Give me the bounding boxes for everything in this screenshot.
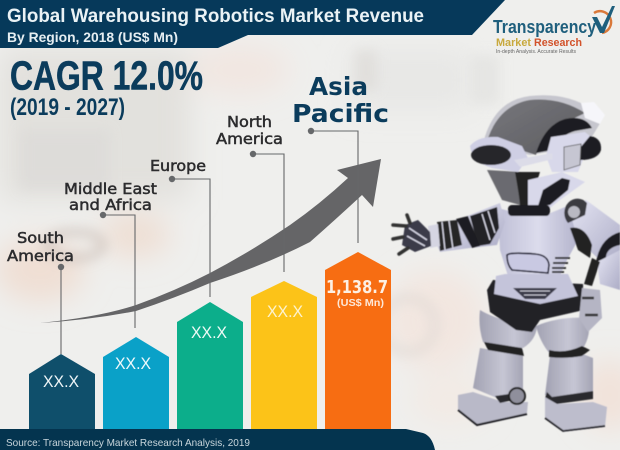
label: South America [7, 229, 74, 265]
bar: Asia Pacific [325, 252, 391, 429]
bar: Asia Pacific: (US$ Mn) [337, 298, 384, 309]
bar: Asia Pacific: 1,138.7 [326, 277, 388, 298]
label: Middle East and Africa: Middle East [64, 180, 157, 198]
bar: North America: XX.X [267, 302, 303, 321]
robot: chest panel [507, 253, 549, 273]
logo: Transparency Market Research [493, 6, 615, 55]
label: North America: America [216, 130, 283, 148]
logo: Transparency Market Research: Transparency [493, 17, 596, 37]
label: Asia Pacific: Pacific [292, 99, 389, 128]
label: Asia Pacific: Asia [309, 72, 368, 101]
CAGR period: (2019 - 2027) [10, 94, 125, 121]
bar: South America: XX.X [43, 372, 79, 391]
CAGR value: CAGR 12.0% [10, 52, 203, 98]
label: North America: North [227, 113, 272, 131]
subtitle: By Region, 2018 (US$ Mn) [7, 29, 178, 45]
bar: Middle East and Africa: XX.X [115, 354, 151, 373]
bar: South America [29, 354, 95, 429]
logo: Transparency Market Research: Market [496, 37, 531, 49]
label: Middle East and Africa: and Africa [69, 196, 152, 214]
robot: hand on hip arm [564, 199, 620, 332]
label: Europe: Europe [150, 157, 206, 175]
robot [393, 95, 620, 432]
label: South America: South [17, 229, 64, 247]
robot: hips [487, 274, 584, 332]
robot: neck and visor [487, 170, 585, 216]
bar: North America [251, 281, 317, 429]
robot: near leg [458, 310, 537, 425]
label: Middle East and Africa [64, 180, 157, 214]
robot: side vents [552, 258, 570, 272]
robot: helmet [484, 95, 605, 172]
connector lines [58, 128, 358, 354]
logo: Transparency Market Research: Research [534, 37, 582, 49]
robot: pointing arm [393, 203, 505, 254]
title: Global Warehousing Robotics Market Revenue [7, 6, 424, 27]
label: South America: America [7, 247, 74, 265]
robot: torso [498, 205, 578, 276]
robot: far leg [536, 318, 607, 432]
bar: Europe [177, 302, 243, 429]
label: North America [216, 113, 283, 148]
growth arrow [40, 159, 381, 323]
logo: Transparency Market Research: In-depth Analysis. Accurate Results [496, 49, 577, 55]
footer bar [0, 429, 435, 450]
label: Asia Pacific [292, 72, 389, 128]
bar: Middle East and Africa [103, 337, 169, 429]
bar: Europe: XX.X [191, 323, 227, 342]
robot: goggles [470, 137, 553, 172]
header banner [0, 0, 505, 48]
source: Source: Transparency Market Research Analysis, 2019 [6, 437, 250, 449]
